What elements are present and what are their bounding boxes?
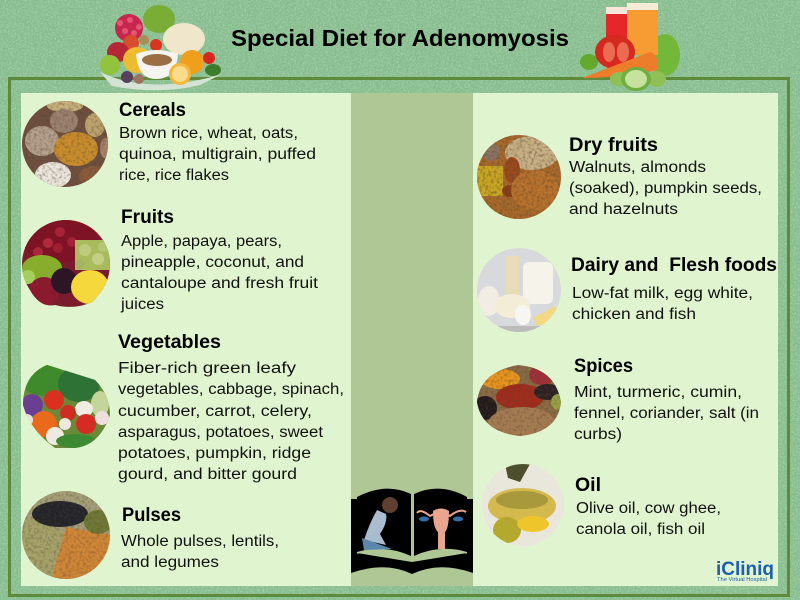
text: pulses list: [121, 533, 279, 571]
text: vegetables list: [118, 360, 344, 483]
text: dry fruits list: and hazelnuts: [569, 201, 678, 218]
icon: oil bowl: [480, 462, 566, 548]
heading: fruits: Fruits: [121, 207, 174, 228]
panel: light green content area: [21, 93, 778, 586]
text: fruits list: [120, 233, 319, 313]
heading: dry fruits: Dry fruits: [569, 135, 658, 156]
text: dairy list: chicken and fish: [572, 306, 696, 323]
icon: juice glasses and vegetables: [580, 3, 680, 91]
text: dry fruits list: Walnuts, almonds: [569, 159, 706, 176]
text: oil list: [576, 500, 721, 538]
text: vegetables list: Fiber-rich green leafy: [118, 360, 296, 377]
title: Special Diet for Adenomyosis: [231, 25, 569, 51]
text: cereals list: quinoa, multigrain, puffed: [119, 146, 316, 163]
text: cereals list: Brown rice, wheat, oats,: [119, 125, 298, 142]
text: vegetables list: cucumber, carrot, celery,: [118, 403, 312, 420]
uterus: [417, 508, 466, 549]
text: vegetables list: asparagus, potatoes, sweet: [118, 424, 324, 441]
text: oil list: canola oil, fish oil: [576, 521, 705, 538]
icon: dry fruits: [475, 133, 563, 221]
text: fruits list: cantaloupe and fresh fruit: [121, 275, 319, 292]
heading: vegetables: Vegetables: [118, 332, 221, 353]
text: dairy list: Low-fat milk, egg white,: [572, 285, 753, 302]
heading: cereals: Cereals: [119, 100, 186, 121]
text: vegetables list: potatoes, pumpkin, ridge: [118, 445, 311, 462]
section: dry fruits: [475, 133, 762, 221]
text: spices list: Mint, turmeric, cumin,: [574, 384, 742, 401]
text: pulses list: and legumes: [121, 554, 219, 571]
text: cereals list: rice, rice flakes: [119, 167, 229, 184]
logo: iCliniq: iCliniq: [716, 559, 774, 580]
text: vegetables list: vegetables, cabbage, spinach,: [118, 381, 344, 398]
heading: dairy and flesh foods: Dairy and Flesh foods: [571, 255, 777, 276]
text: dry fruits list: (soaked), pumpkin seeds,: [569, 180, 762, 197]
text: vegetables list: gourd, and bitter gourd: [118, 466, 297, 483]
icon: dairy: [475, 246, 563, 334]
text: spices list: [574, 384, 759, 443]
text: spices list: fennel, coriander, salt (in: [574, 405, 759, 422]
text: fruits list: pineapple, coconut, and: [121, 254, 304, 271]
section: oil: [480, 462, 721, 548]
icon: open book with woman and uterus: [351, 489, 473, 574]
heading: spices: Spices: [574, 356, 633, 377]
woman: [362, 497, 398, 550]
heading: pulses: Pulses: [122, 505, 181, 526]
text: pulses list: Whole pulses, lentils,: [121, 533, 279, 550]
section: dairy and flesh foods: [475, 246, 777, 334]
icon: vegetables: [23, 365, 110, 448]
text: fruits list: Apple, papaya, pears,: [121, 233, 282, 250]
icon: spices: [477, 365, 561, 436]
text: dry fruits list: [569, 159, 762, 218]
section: vegetables: [20, 332, 344, 483]
heading: oil: Oil: [575, 475, 601, 496]
section: cereals: [20, 100, 316, 190]
text: cereals list: [119, 125, 316, 184]
text: fruits list: juices: [120, 296, 164, 313]
icon: fruit and vegetable pile: [100, 5, 222, 90]
section: fruits: [20, 207, 319, 313]
text: dairy list: [572, 285, 753, 323]
centre band: [351, 93, 473, 586]
text: oil list: Olive oil, cow ghee,: [576, 500, 721, 517]
section: pulses: [20, 490, 279, 585]
text: spices list: curbs): [574, 426, 622, 443]
icon: pulses: [22, 491, 110, 579]
icon: cereals bowls: [20, 100, 110, 190]
logo: iCliniq: The Virtual Hospital: [717, 577, 767, 583]
icon: fruits: [22, 220, 110, 307]
section: spices: [473, 356, 759, 443]
